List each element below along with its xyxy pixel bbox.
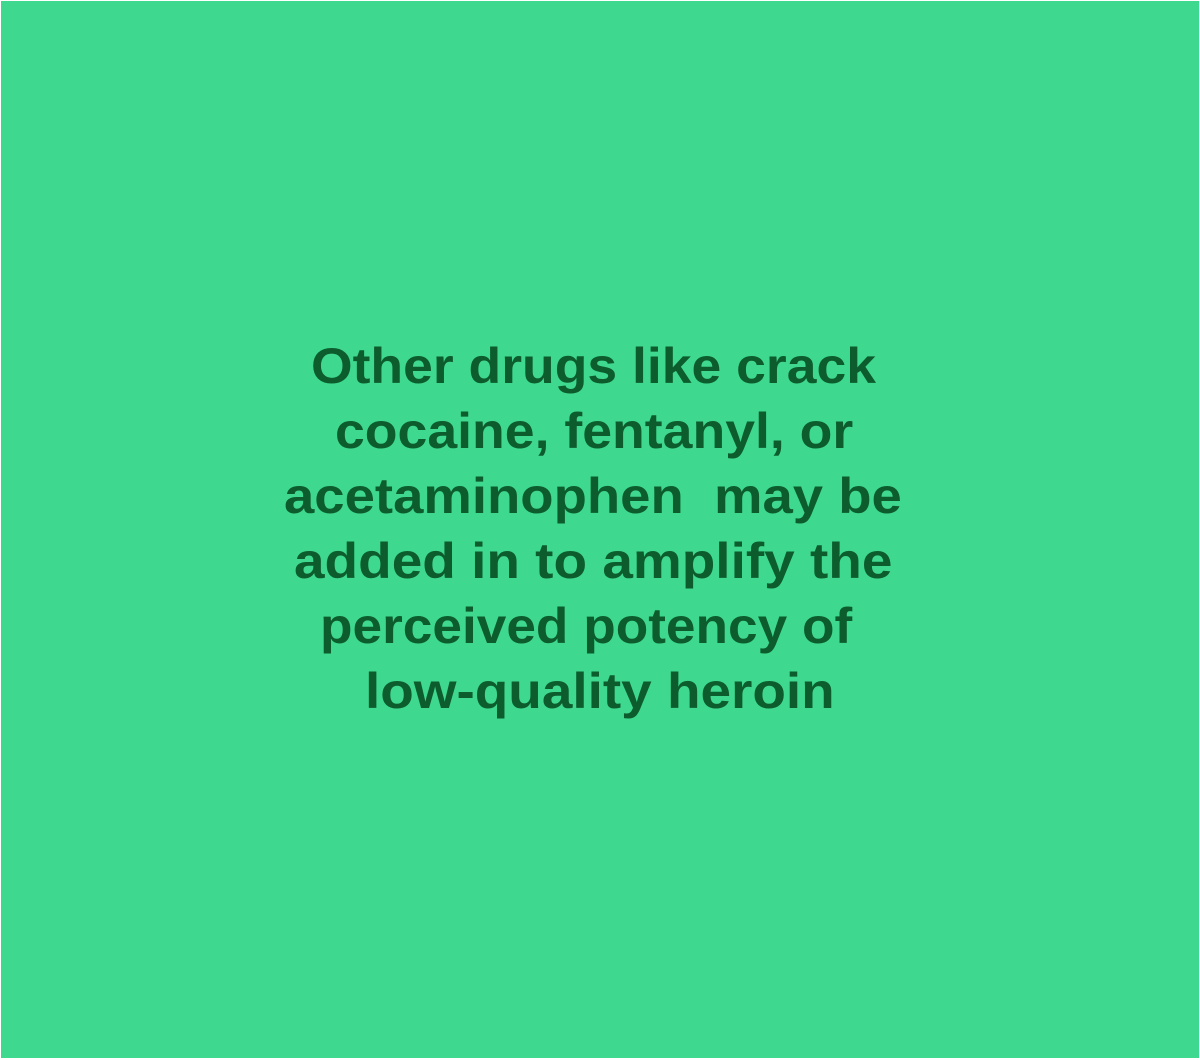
- text block: callout: acetaminophen may be: [284, 468, 902, 524]
- text block: callout: added in to amplify the: [294, 533, 892, 589]
- text block: callout: perceived potency of: [320, 598, 852, 654]
- text block: callout: cocaine, fentanyl, or: [335, 403, 853, 459]
- text block: callout: low-quality heroin: [365, 663, 835, 719]
- text block: callout: Other drugs like crack: [311, 338, 876, 394]
